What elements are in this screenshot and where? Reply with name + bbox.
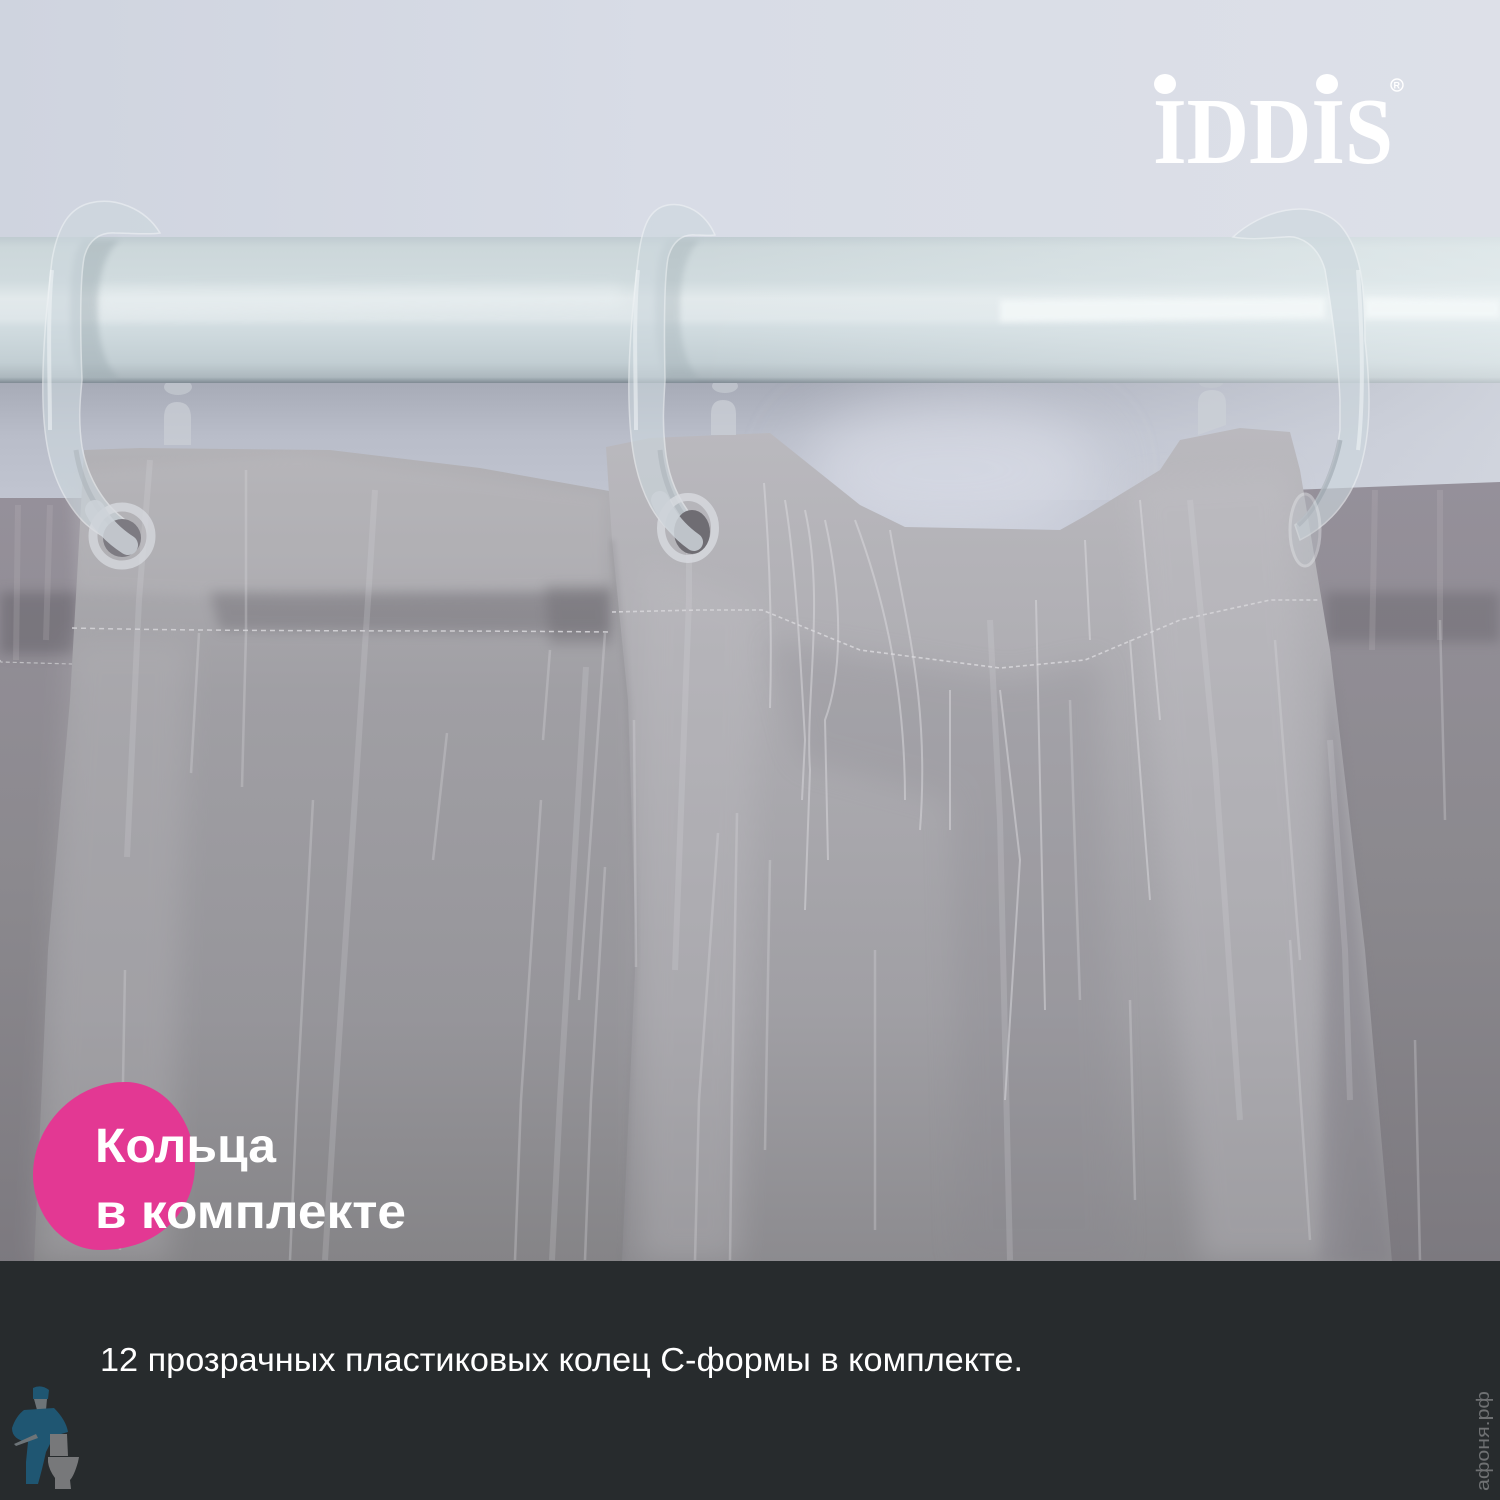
description text: 12 прозрачных пластиковых колец С-формы в комплекте. (100, 1342, 1023, 1379)
logo: iddis: IDDIS (1153, 80, 1393, 184)
shower rod (0, 237, 1500, 383)
rain streaks pattern (120, 460, 1445, 1260)
pegs behind rod (164, 378, 1226, 445)
bottom dark band (0, 1261, 1500, 1500)
watermark text: афоня.рф (1473, 1391, 1493, 1491)
ring right (1233, 209, 1369, 540)
grommets (93, 494, 1320, 566)
ring left (43, 201, 160, 540)
curtain panel: middle (606, 428, 1392, 1262)
heading: в комплекте (95, 1186, 406, 1239)
heading: Кольца (95, 1120, 276, 1173)
watermark icon: plumber with toilet (12, 1386, 79, 1489)
logo: iddis: R (1394, 80, 1400, 90)
curtain panel: left (34, 448, 680, 1262)
wall background (0, 0, 1500, 540)
ring center (629, 204, 715, 545)
heading (95, 1120, 406, 1239)
back curtain (0, 482, 1500, 1268)
pink blob accent (33, 1082, 195, 1250)
